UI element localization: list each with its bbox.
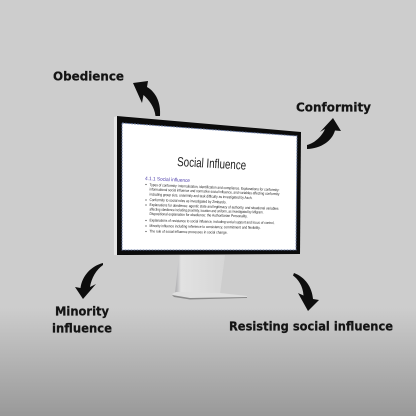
label: Obedience: Obedience [53,68,124,84]
label: Conformity: Conformity [296,100,371,114]
label: Minority influence: influence [52,320,112,336]
slide bullet list: Explanations for obedience: agentic state and legitimacy of authority, and situational variables [149,203,279,211]
slide bullet list: Dispositional explanation for obedience: the Authoritarian Personality. [149,212,248,218]
label: Resisting social influence: Resisting social influence [229,318,393,334]
slide bullet list: Minority influence including reference to consistency, commitment and flexibility. [149,224,261,230]
slide bullet list: including group size, unanimity and task difficulty as investigated by Asch. [149,193,253,200]
monitor screen [122,123,297,250]
arrow: to Conformity [307,118,341,149]
monitor stand [172,255,247,300]
slide bullet list: Conformity to social roles as investigated by Zimbardo. [149,198,227,204]
slide bullet list: The role of social influence processes in social change. [149,230,228,235]
arrow: to Resisting social influence [293,273,319,311]
monitor frame [117,116,301,255]
slide bullet list: informational social influence and normative social influence, and variables affecting conformity [149,188,280,196]
arrow: to Obedience [133,81,160,116]
monitor side edge [114,116,117,255]
slide content [145,154,280,235]
monitor [114,116,301,300]
slide bullet list: Types of conformity: internalisation, identification and compliance. Explanations for conformity: [149,183,280,192]
label: Minority influence [52,304,112,336]
slide bullet list: affecting obedience including proximity, location and uniform, as investigated by Milgram. [149,208,264,214]
slide subheading: 4.1.1 Social influence [145,176,190,184]
label: Minority influence: Minority [55,304,109,318]
arrow: to Minority influence [75,263,103,299]
slide bullet list [145,183,280,235]
slide bullet list: Explanations of resistance to social influence, including social support and locus of control. [149,219,275,225]
slide title: Social Influence [177,154,247,173]
